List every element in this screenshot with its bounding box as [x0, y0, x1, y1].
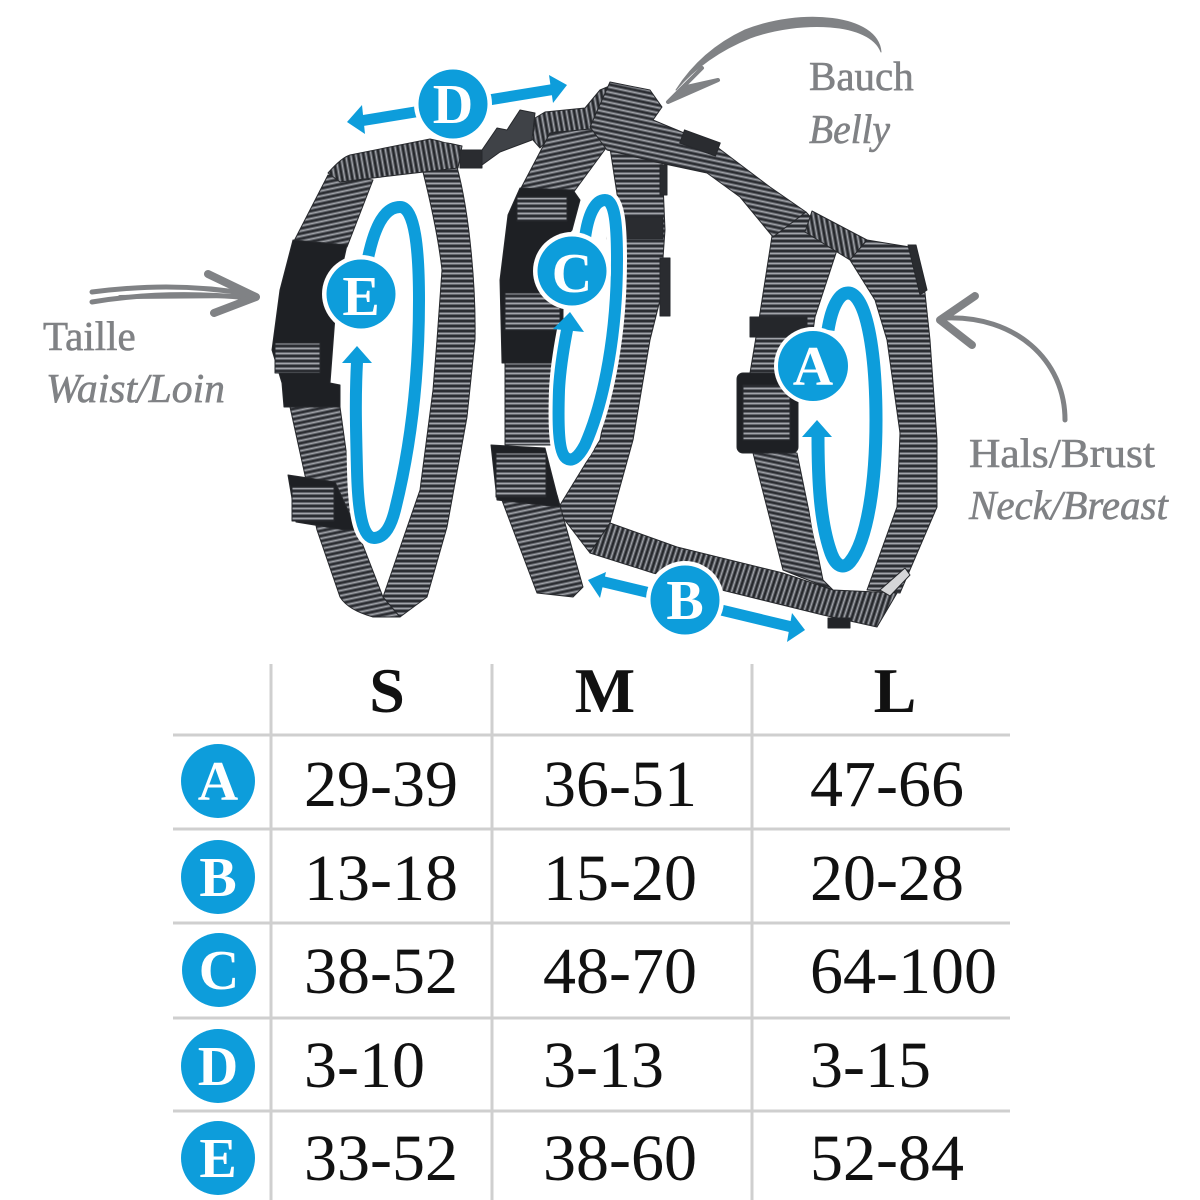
row C: [182, 933, 997, 1008]
label: belly: [809, 53, 914, 152]
dimension arrow: D: D: [433, 74, 473, 136]
size table: [173, 655, 1010, 1200]
row E: E: [199, 1128, 237, 1190]
row D: 3-10: [304, 1029, 425, 1102]
row B: 15-20: [543, 842, 697, 915]
row B: 20-28: [810, 842, 964, 915]
measure loop: C: [533, 200, 617, 459]
label: waist: [43, 313, 225, 411]
label: belly: Bauch: [809, 53, 914, 99]
row C: 48-70: [543, 935, 697, 1008]
row E: 38-60: [543, 1122, 697, 1195]
label: neck: Neck/Breast: [968, 482, 1169, 528]
pointer arrow: waist: [92, 274, 256, 313]
row C: C: [199, 940, 239, 1002]
row C: 64-100: [810, 935, 997, 1008]
row B: [181, 840, 964, 915]
waist strap loop: [272, 139, 475, 617]
dimension arrow: D: [347, 65, 567, 143]
label: neck: Hals/Brust: [969, 430, 1156, 476]
measure loop: E: [322, 207, 419, 538]
label: belly: Belly: [809, 106, 891, 152]
table header: L: [874, 655, 916, 726]
table header: S: [369, 655, 405, 726]
bottom strap: [590, 523, 910, 628]
waist-to-centre connector and clip: [460, 85, 625, 168]
label: waist: Taille: [43, 313, 136, 359]
row E: 52-84: [810, 1122, 964, 1195]
row D: 3-15: [810, 1029, 931, 1102]
label: neck: [968, 430, 1169, 528]
pointer arrow: neck: [940, 296, 1065, 420]
label: waist: Waist/Loin: [46, 365, 225, 411]
measure loop: E: E: [342, 266, 380, 328]
row D: [181, 1029, 931, 1103]
top strap: [590, 82, 806, 237]
pointer arrow: belly: [668, 17, 881, 102]
row D: D: [198, 1036, 238, 1098]
row E: 33-52: [304, 1122, 458, 1195]
measure loop: A: [774, 293, 876, 566]
harness illustration: [272, 82, 937, 628]
dimension arrow: B: B: [666, 570, 704, 632]
measure loop: A: A: [793, 336, 834, 398]
row A: [181, 744, 964, 821]
row A: 47-66: [810, 748, 964, 821]
row D: 3-13: [543, 1029, 664, 1102]
row A: 36-51: [543, 748, 697, 821]
belly strap: [491, 128, 670, 597]
table header: [369, 655, 916, 726]
row B: 13-18: [304, 842, 458, 915]
dimension arrow: B: [588, 561, 805, 642]
row A: 29-39: [304, 748, 458, 821]
row A: A: [198, 751, 239, 813]
neck strap loop: [737, 211, 937, 593]
row E: [181, 1121, 964, 1195]
row B: B: [199, 847, 237, 909]
row C: 38-52: [304, 935, 458, 1008]
measure loop: C: C: [552, 243, 592, 305]
table header: M: [575, 655, 635, 726]
